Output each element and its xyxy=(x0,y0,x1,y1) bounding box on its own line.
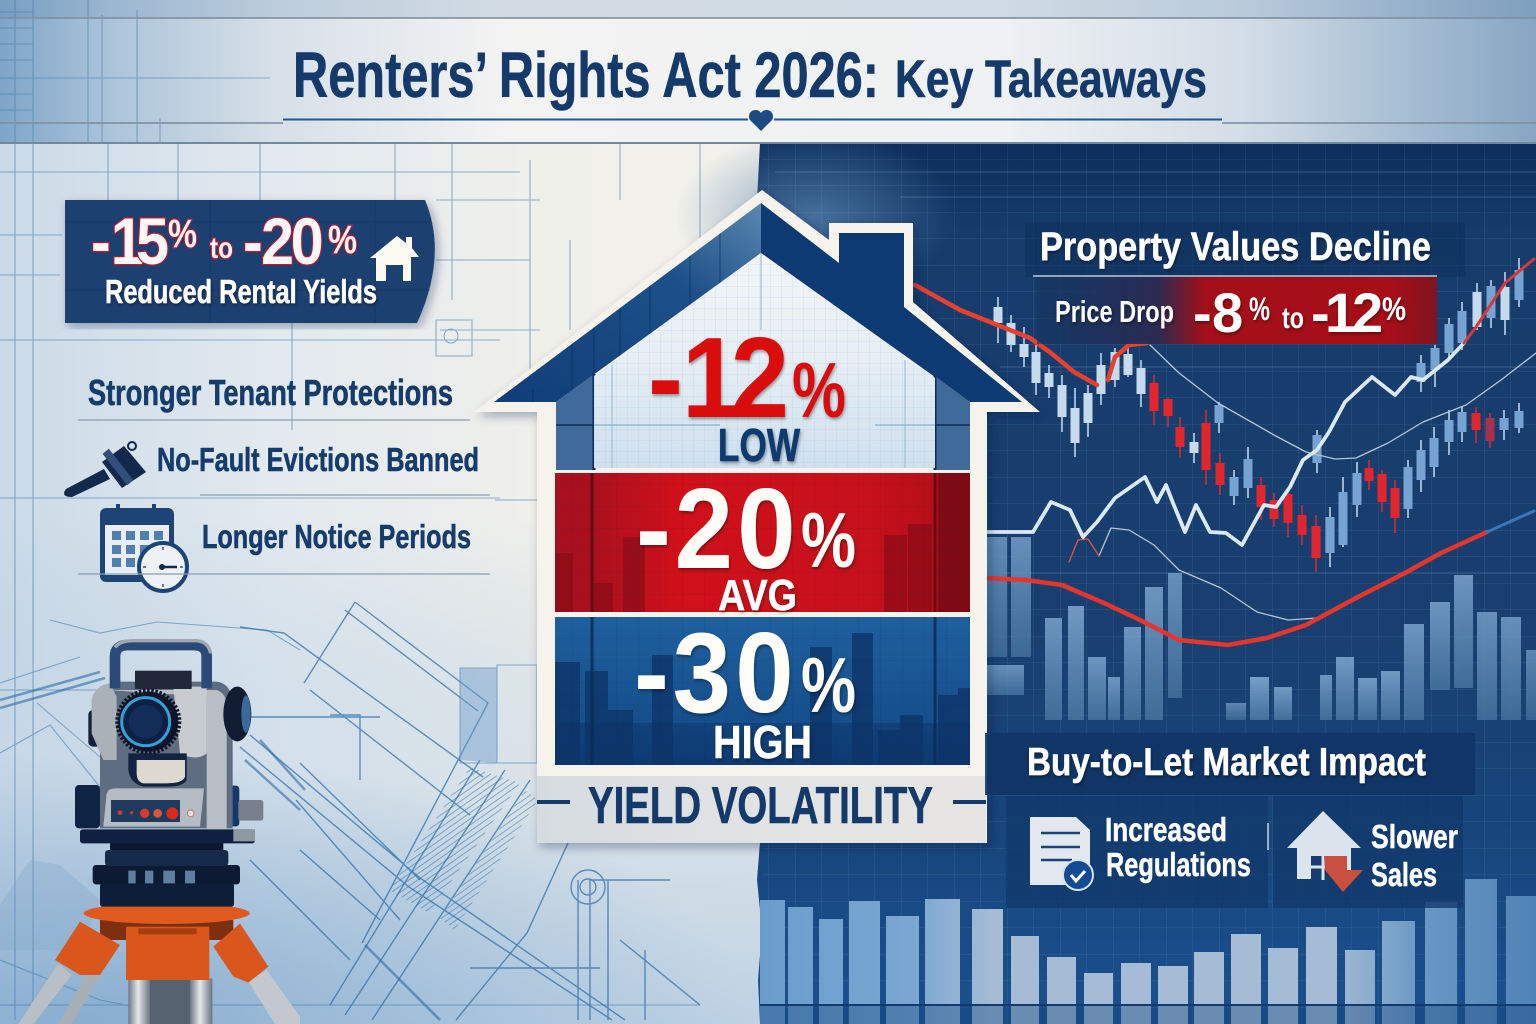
red band: average: % xyxy=(801,496,856,584)
panel: property values decline: Price Drop xyxy=(1055,294,1174,329)
bar chart: bottom row xyxy=(760,879,1536,1024)
figure: -15% to -20%: -20 xyxy=(243,205,324,279)
lens xyxy=(118,692,178,752)
red candles xyxy=(1150,383,1480,558)
wall side panels xyxy=(556,374,970,470)
line chart: price trend lines xyxy=(915,259,1536,645)
icon: gavel xyxy=(64,442,146,497)
red band: average: -20 xyxy=(636,466,796,593)
focus knob xyxy=(223,687,251,741)
figure: -15% to -20%: to xyxy=(210,232,233,265)
panel: buy-to-let market impact: Regulations xyxy=(1106,846,1251,883)
figure: -15% to -20%: % xyxy=(328,218,357,262)
left blueprint background xyxy=(0,143,775,1024)
icon: document with check xyxy=(1030,817,1093,890)
item: no-fault evictions banned xyxy=(64,441,479,497)
item: longer notice periods xyxy=(100,504,471,591)
gable interior: low band xyxy=(594,253,935,471)
heading: stronger tenant protections: Stronger Tenant Protections xyxy=(88,372,453,413)
blue band: high: HIGH xyxy=(713,716,812,768)
header band xyxy=(0,0,1536,143)
panel: buy-to-let market impact: Buy-to-Let Market Impact xyxy=(1027,741,1426,784)
bar chart: middle row xyxy=(985,537,1536,720)
red band: average xyxy=(555,466,970,620)
gable interior: low band: -12 xyxy=(648,315,789,442)
title: Key Takeaways xyxy=(895,50,1207,109)
title: Renters’ Rights Act 2026: xyxy=(293,39,879,111)
panel: property values decline: Property Values Decline xyxy=(1040,225,1431,269)
panel: property values decline: % xyxy=(1249,291,1270,327)
tripod orange head xyxy=(55,903,268,983)
right dark chart background xyxy=(675,130,1536,1024)
figure: -15% to -20% xyxy=(91,205,357,279)
icon: calendar and clock xyxy=(100,504,187,591)
red band: average: AVG xyxy=(718,571,797,620)
divider lines, left column xyxy=(78,420,490,574)
item: no-fault evictions banned: No-Fault Evictions Banned xyxy=(157,441,479,478)
panel: property values decline: to xyxy=(1282,302,1304,335)
icon: house xyxy=(370,236,419,281)
gable interior: low band: LOW xyxy=(718,419,800,471)
panel: buy-to-let market impact xyxy=(985,733,1475,908)
item: longer notice periods: Longer Notice Periods xyxy=(202,518,471,555)
blueprint plan drawing xyxy=(240,602,700,1020)
roof xyxy=(494,203,1022,410)
instrument base xyxy=(80,829,255,907)
control panel with red lights xyxy=(103,788,204,827)
blue band: high xyxy=(555,610,970,768)
panel: buy-to-let market impact: Increased xyxy=(1105,811,1227,848)
candlestick chart xyxy=(994,258,1524,572)
icon: house with down arrow xyxy=(1287,811,1363,892)
tripod legs xyxy=(18,963,300,1024)
panel: property values decline: -12 xyxy=(1311,281,1383,344)
blue band: high: -30 xyxy=(634,610,794,737)
panel: property values decline xyxy=(1025,222,1465,344)
panel: property values decline: -8 xyxy=(1193,281,1243,344)
figure: -15% to -20%: % xyxy=(168,212,197,256)
house infographic xyxy=(474,190,1040,843)
panel: property values decline: % xyxy=(1382,291,1406,327)
blue candles xyxy=(1214,270,1524,553)
blue band: high: % xyxy=(801,641,856,729)
label: reduced rental yields: Reduced Rental Yields xyxy=(105,273,377,310)
panel: buy-to-let market impact: Sales xyxy=(1371,856,1437,893)
price drop strip xyxy=(1037,277,1437,344)
carrying handle xyxy=(115,645,207,688)
candle wicks xyxy=(998,258,1519,567)
plate: yield volatility: YIELD VOLATILITY xyxy=(588,777,933,835)
gable interior: low band: % xyxy=(792,346,846,434)
house outline xyxy=(474,190,1040,843)
panel: reduced rental yields xyxy=(65,200,435,323)
plate: yield volatility xyxy=(537,776,986,843)
light candles xyxy=(994,287,1510,453)
icon: surveying total station on tripod xyxy=(18,641,300,1024)
panel: buy-to-let market impact: Slower xyxy=(1371,818,1458,855)
figure: -15% to -20%: -15 xyxy=(91,205,169,279)
title divider with heart xyxy=(283,110,1222,131)
instrument body xyxy=(75,682,263,828)
